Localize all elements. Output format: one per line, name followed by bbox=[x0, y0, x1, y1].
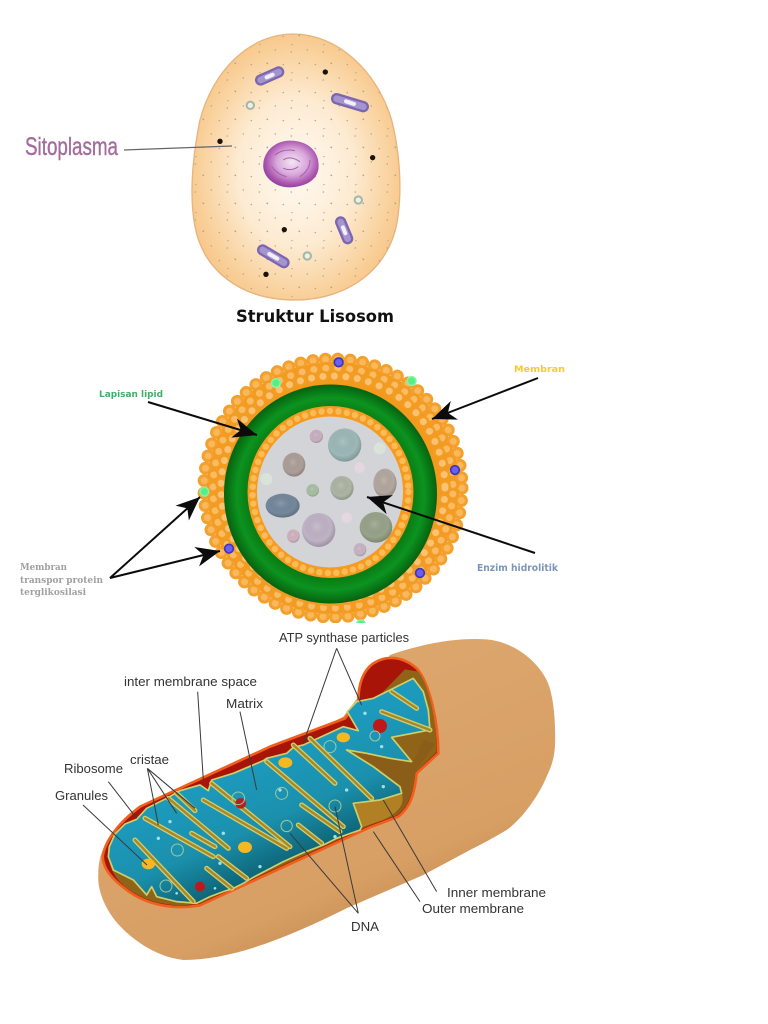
label: Sitoplasma: Sitoplasma bbox=[25, 133, 118, 161]
label: ATP synthase particles: ATP synthase particles bbox=[279, 631, 409, 645]
label: Matrix: Matrix bbox=[226, 697, 264, 711]
matrix bbox=[108, 678, 430, 903]
label: Membran transpor protein terglikosilasi: terglikosilasi bbox=[20, 588, 87, 598]
label: cristae: cristae bbox=[130, 753, 169, 767]
label: Ribosome: Ribosome bbox=[64, 762, 123, 776]
interior shadow bbox=[108, 669, 437, 905]
cytoplasm granules bbox=[190, 33, 403, 302]
hydrolytic enzymes bbox=[260, 428, 397, 556]
cell body bbox=[192, 34, 400, 300]
organelles: mitochondria bbox=[261, 72, 363, 263]
label: Outer membrane: Outer membrane bbox=[422, 902, 524, 916]
cut surface bbox=[103, 658, 438, 907]
label: Membran transpor protein terglikosilasi: Membran bbox=[20, 563, 67, 573]
organelles: vesicles bbox=[247, 102, 362, 260]
granules and ribosomes bbox=[142, 719, 387, 892]
DNA loops bbox=[160, 731, 380, 892]
panel: cytoplasm cell bbox=[190, 33, 403, 302]
nucleus bbox=[263, 141, 319, 187]
lipid layer bbox=[224, 384, 437, 604]
label: Enzim hidrolitik: Enzim hidrolitik bbox=[477, 563, 559, 574]
label: Inner membrane: Inner membrane bbox=[447, 886, 546, 900]
label: Granules: Granules bbox=[55, 789, 108, 803]
label: Lapisan lipid: Lapisan lipid bbox=[99, 390, 163, 400]
arrows: lysosome callouts bbox=[110, 378, 538, 578]
organelles: black granules bbox=[217, 69, 375, 277]
label: DNA: DNA bbox=[351, 920, 380, 934]
label: Membran transpor protein terglikosilasi: transpor protein bbox=[20, 576, 103, 586]
inner membrane beads bbox=[248, 406, 414, 578]
label: Sitoplasma bbox=[25, 133, 232, 161]
leader lines bbox=[83, 648, 437, 913]
matrix particles bbox=[157, 712, 385, 895]
label: Membran: Membran bbox=[514, 365, 565, 375]
transport proteins bbox=[200, 358, 459, 629]
outer body bbox=[98, 639, 555, 960]
outer membrane beads bbox=[204, 359, 462, 617]
label: Membran transpor protein terglikosilasi bbox=[20, 563, 103, 598]
infographic canvas bbox=[20, 33, 564, 960]
cristae bbox=[135, 692, 430, 902]
panel: lysosome bbox=[200, 358, 462, 629]
interior back wall bbox=[352, 740, 435, 827]
label: inter membrane space: inter membrane space bbox=[124, 675, 257, 689]
mitochondrion labels bbox=[55, 631, 546, 934]
lumen bbox=[257, 416, 403, 568]
panel: mitochondrion bbox=[83, 639, 555, 960]
heading: Struktur Lisosom: Struktur Lisosom bbox=[236, 307, 394, 327]
